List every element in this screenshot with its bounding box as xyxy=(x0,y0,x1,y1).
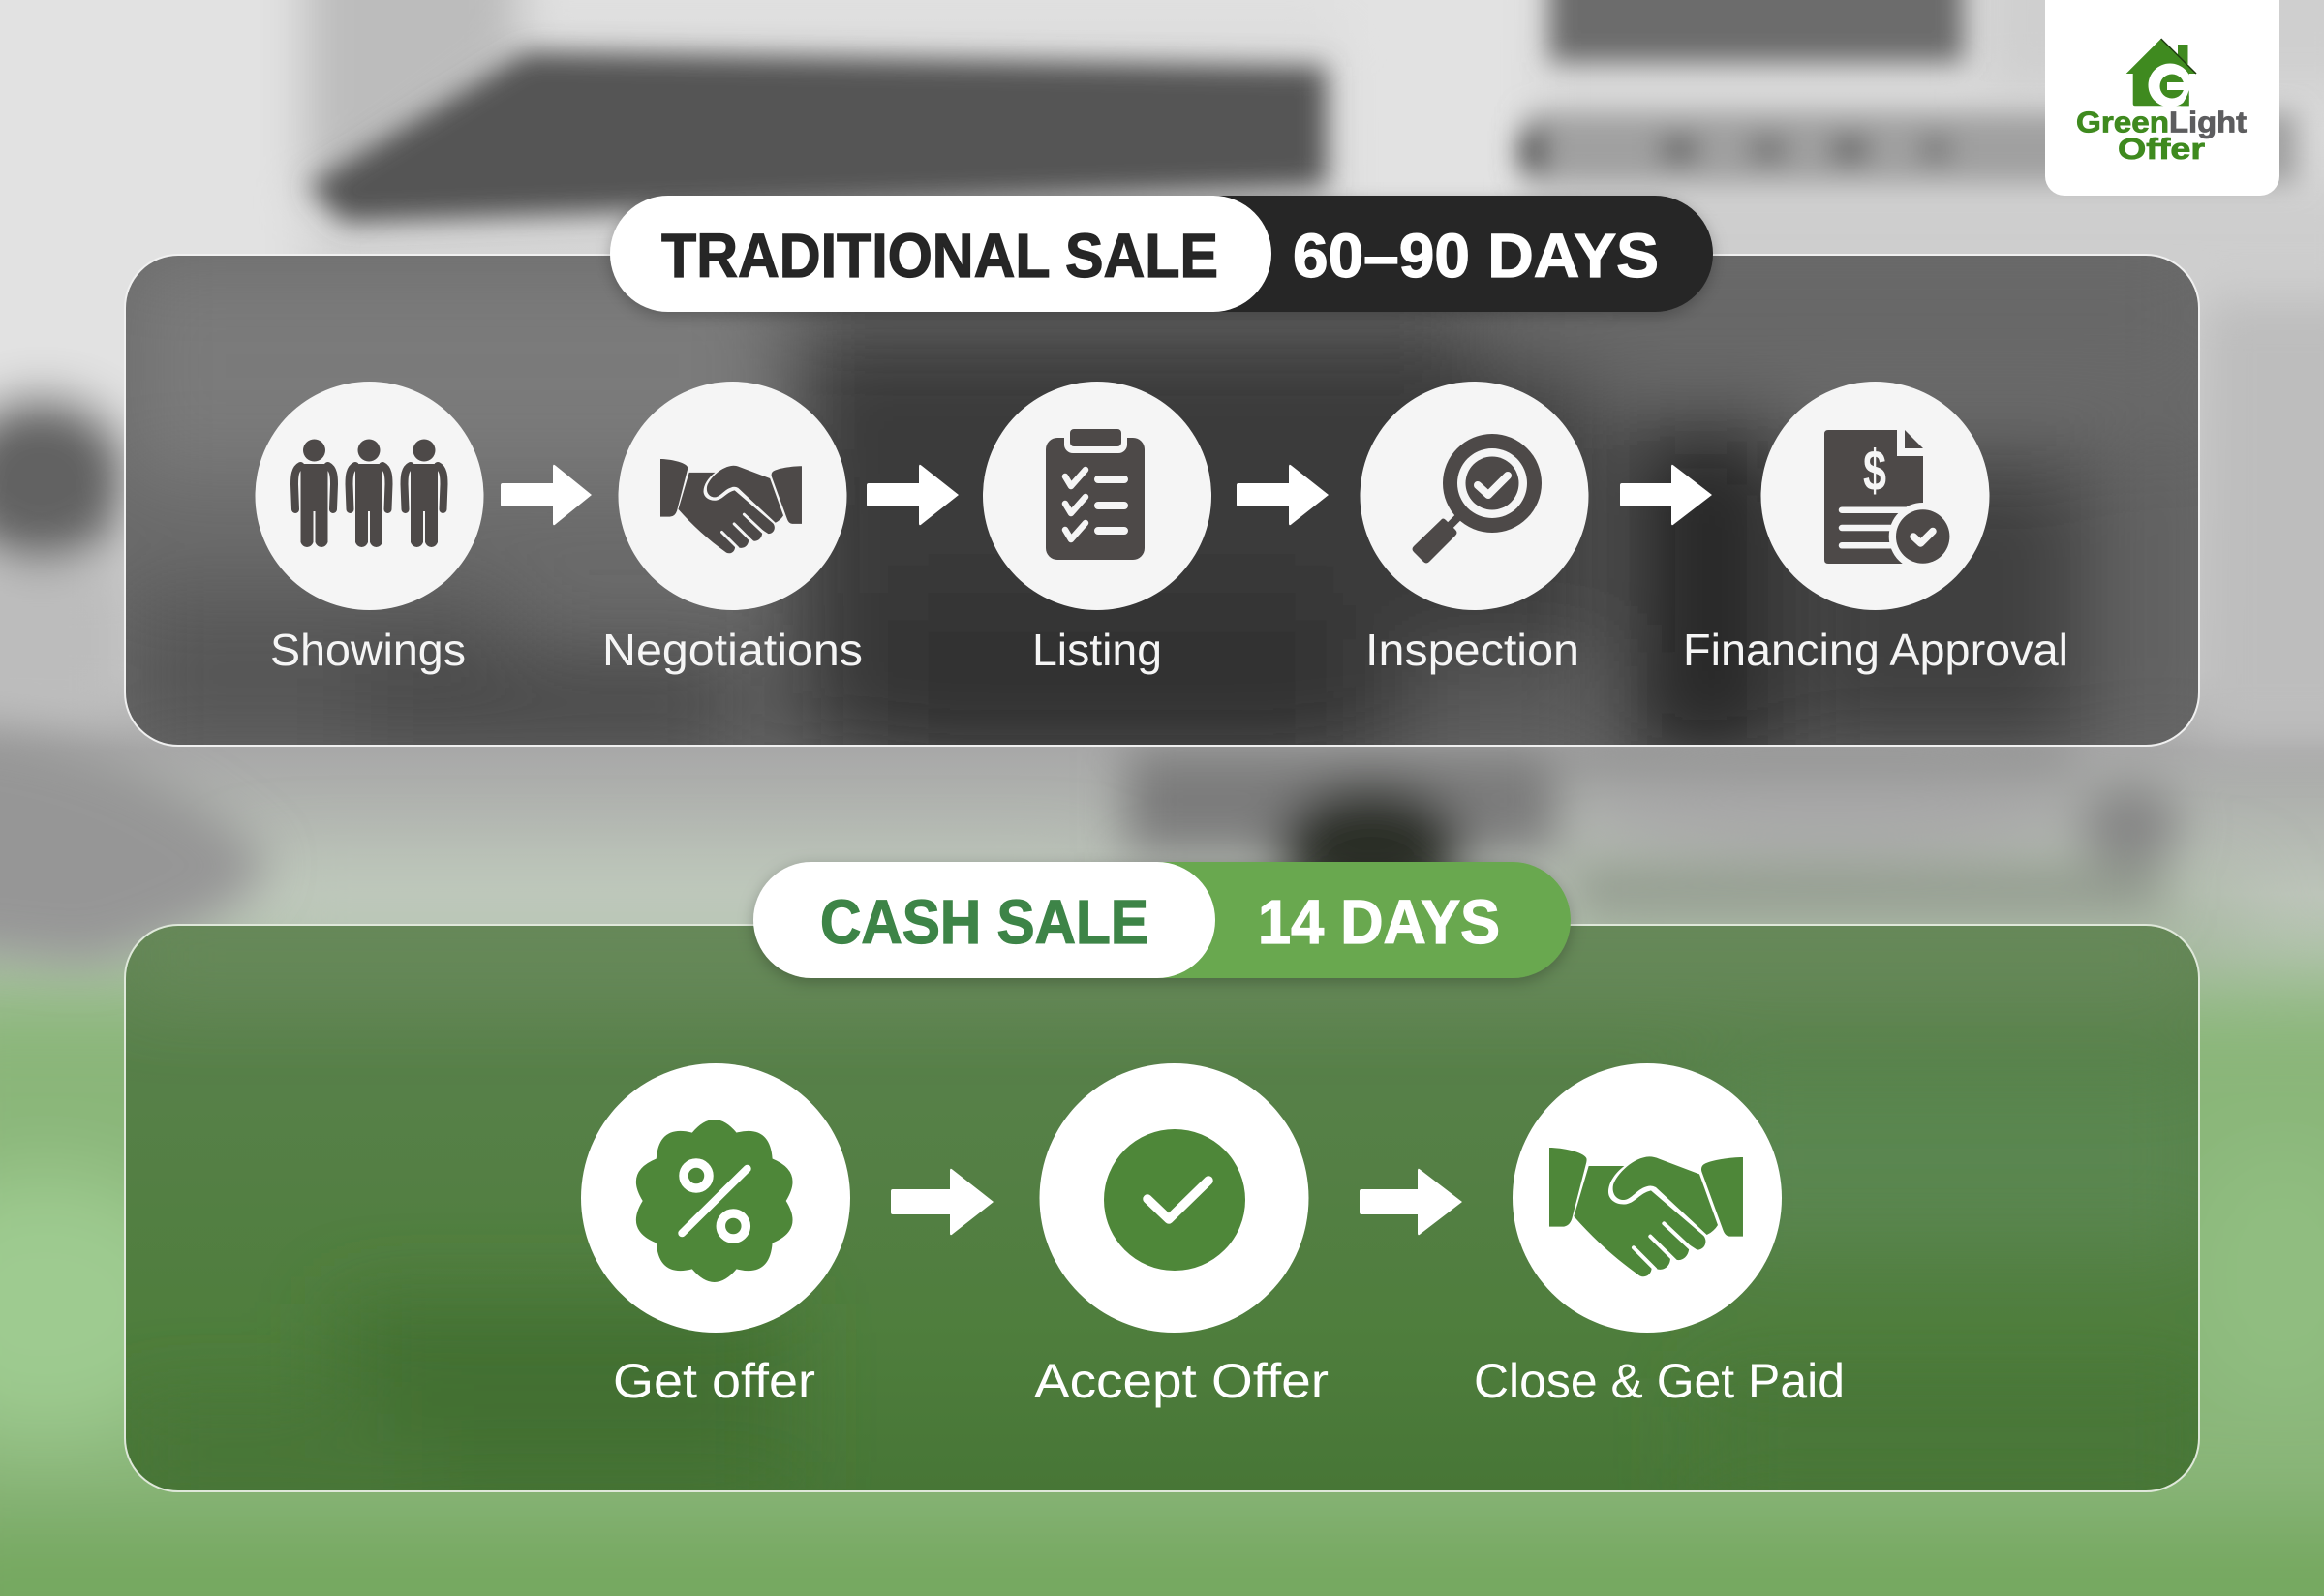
arrow xyxy=(1360,1169,1462,1235)
logo: wordmark: Offer xyxy=(2118,132,2205,166)
panel: traditional sale xyxy=(125,196,2216,771)
arrow xyxy=(501,465,592,525)
title pill xyxy=(610,196,1271,312)
panel background xyxy=(125,255,2216,771)
label: Negotiations xyxy=(602,625,863,675)
label: Listing xyxy=(1032,625,1162,675)
title pill xyxy=(753,862,1215,978)
heading pill: traditional sale 60-90 days xyxy=(610,196,1713,312)
label: Showings xyxy=(270,625,466,675)
panel border xyxy=(125,925,2199,1491)
step: negotiations xyxy=(602,382,863,675)
arrow xyxy=(891,1169,994,1235)
panel border xyxy=(125,255,2199,746)
icon: percent badge xyxy=(636,1120,793,1282)
logo card xyxy=(2045,0,2279,196)
heading pill: cash sale 14 days xyxy=(753,862,1571,978)
label: Inspection xyxy=(1365,625,1579,675)
arrow xyxy=(867,465,959,525)
step: showings xyxy=(256,382,484,675)
icon: handshake xyxy=(1549,1148,1743,1276)
title pill: TRADITIONAL SALE xyxy=(661,221,1218,291)
icon: check circle xyxy=(1104,1129,1245,1271)
icon: three people xyxy=(294,440,443,547)
label: Get offer xyxy=(613,1354,815,1408)
step: close and get paid xyxy=(1474,1063,1845,1408)
icon: handshake xyxy=(660,459,802,553)
icon: checklist clipboard xyxy=(1046,422,1145,560)
duration pill xyxy=(1143,196,1713,312)
step: listing xyxy=(983,382,1211,675)
logo: wordmark: Green xyxy=(2076,106,2169,139)
step: inspection xyxy=(1360,382,1588,675)
label: Close & Get Paid xyxy=(1474,1354,1845,1408)
logo: wordmark xyxy=(2076,106,2247,166)
arrow xyxy=(1620,465,1712,525)
label: Financing Approval xyxy=(1683,625,2068,675)
step: accept offer xyxy=(1034,1063,1329,1408)
duration pill: 60–90 DAYS xyxy=(1293,221,1659,291)
arrow xyxy=(1237,465,1329,525)
logo: house mark xyxy=(2126,39,2196,107)
title pill: CASH SALE xyxy=(820,887,1148,957)
panel: cash sale xyxy=(125,862,2209,1497)
icon: magnifier with check xyxy=(1412,434,1542,564)
step: financing approval xyxy=(1683,382,2068,675)
logo: wordmark: Light xyxy=(2169,106,2247,139)
duration pill xyxy=(1094,862,1571,978)
icon: document with dollar and check: $ xyxy=(1863,439,1886,503)
step: get offer xyxy=(581,1063,850,1408)
label: Accept Offer xyxy=(1034,1354,1329,1408)
panel background xyxy=(125,925,2209,1497)
duration pill: 14 DAYS xyxy=(1258,887,1500,957)
icon: document with dollar and check xyxy=(1824,430,1957,570)
